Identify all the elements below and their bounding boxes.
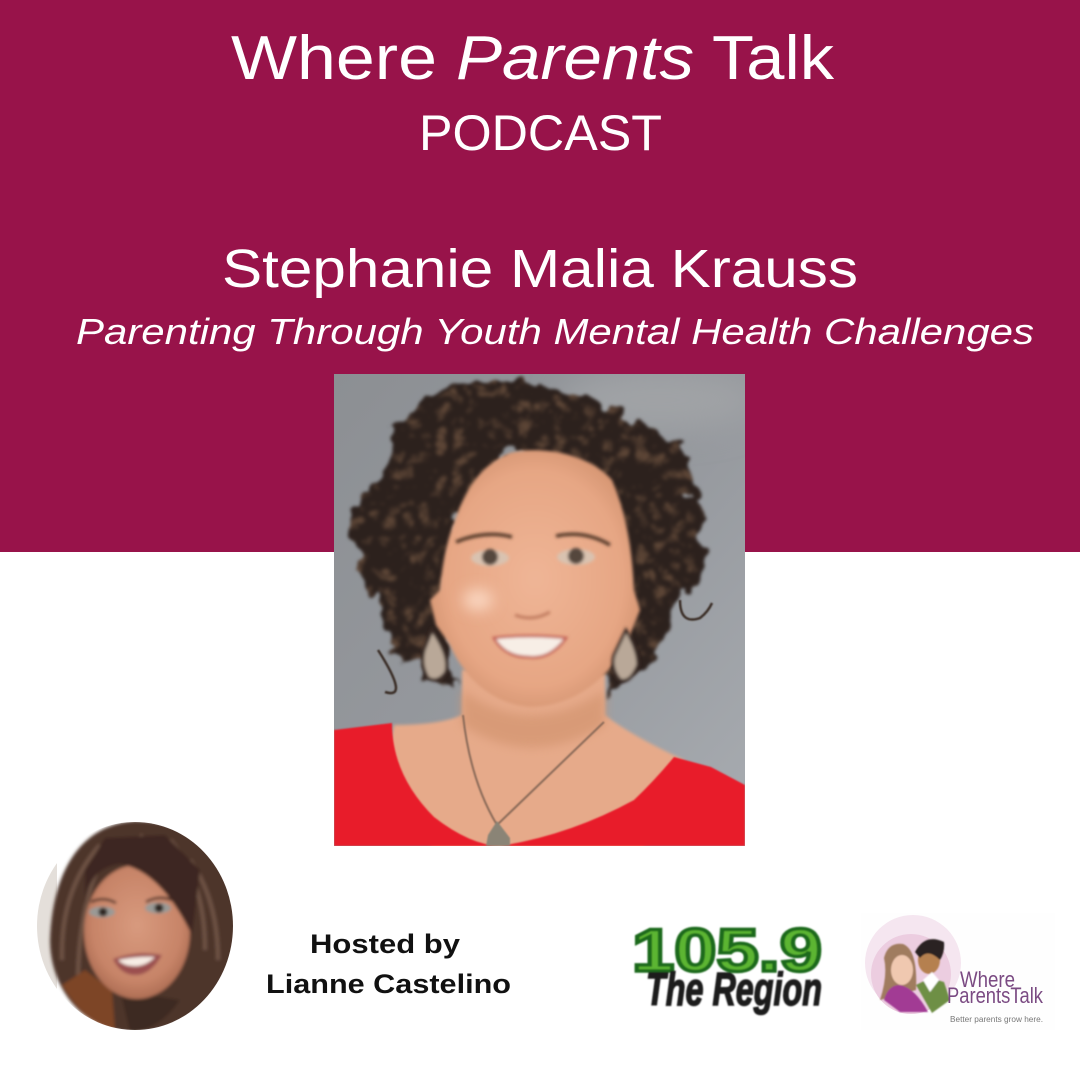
title: Where Parents Talk: Talk <box>712 24 835 93</box>
face <box>430 450 640 707</box>
logo: 105.9 The Region: 105.9 <box>632 917 822 984</box>
title: Where Parents Talk <box>231 24 835 93</box>
host credit: Hosted by <box>310 929 460 959</box>
logo: Where Parents Talk: ParentsTalk <box>947 983 1044 1008</box>
necklace <box>463 715 604 846</box>
stray curls <box>378 600 712 693</box>
maroon header panel <box>0 0 1080 552</box>
logo: Where Parents Talk <box>861 913 1055 1030</box>
host face <box>84 865 190 999</box>
host credit: Lianne Castelino <box>266 969 511 999</box>
hair <box>357 382 704 693</box>
red top <box>334 723 745 846</box>
host credit <box>266 929 511 999</box>
title: Where Parents Talk: Where <box>231 24 437 93</box>
logo: 105.9 The Region <box>632 917 822 1015</box>
cheek highlight <box>463 589 493 611</box>
subtitle: PODCAST: PODCAST <box>419 105 662 161</box>
episode title: Parenting Through Youth Mental Health Challenges <box>76 311 1034 352</box>
guest name: Stephanie Malia Krauss <box>222 239 858 299</box>
host portrait photo <box>37 822 233 1030</box>
logo: Where Parents Talk: Where <box>960 967 1015 992</box>
guest portrait photo <box>334 370 760 855</box>
earrings <box>423 630 638 681</box>
facial features <box>456 534 610 657</box>
logo: 105.9 The Region: The Region <box>646 963 822 1015</box>
logo: Where Parents Talk: Better parents grow here. <box>950 1015 1043 1024</box>
neck and chest <box>380 670 684 855</box>
title: Where Parents Talk: Parents <box>456 24 694 93</box>
